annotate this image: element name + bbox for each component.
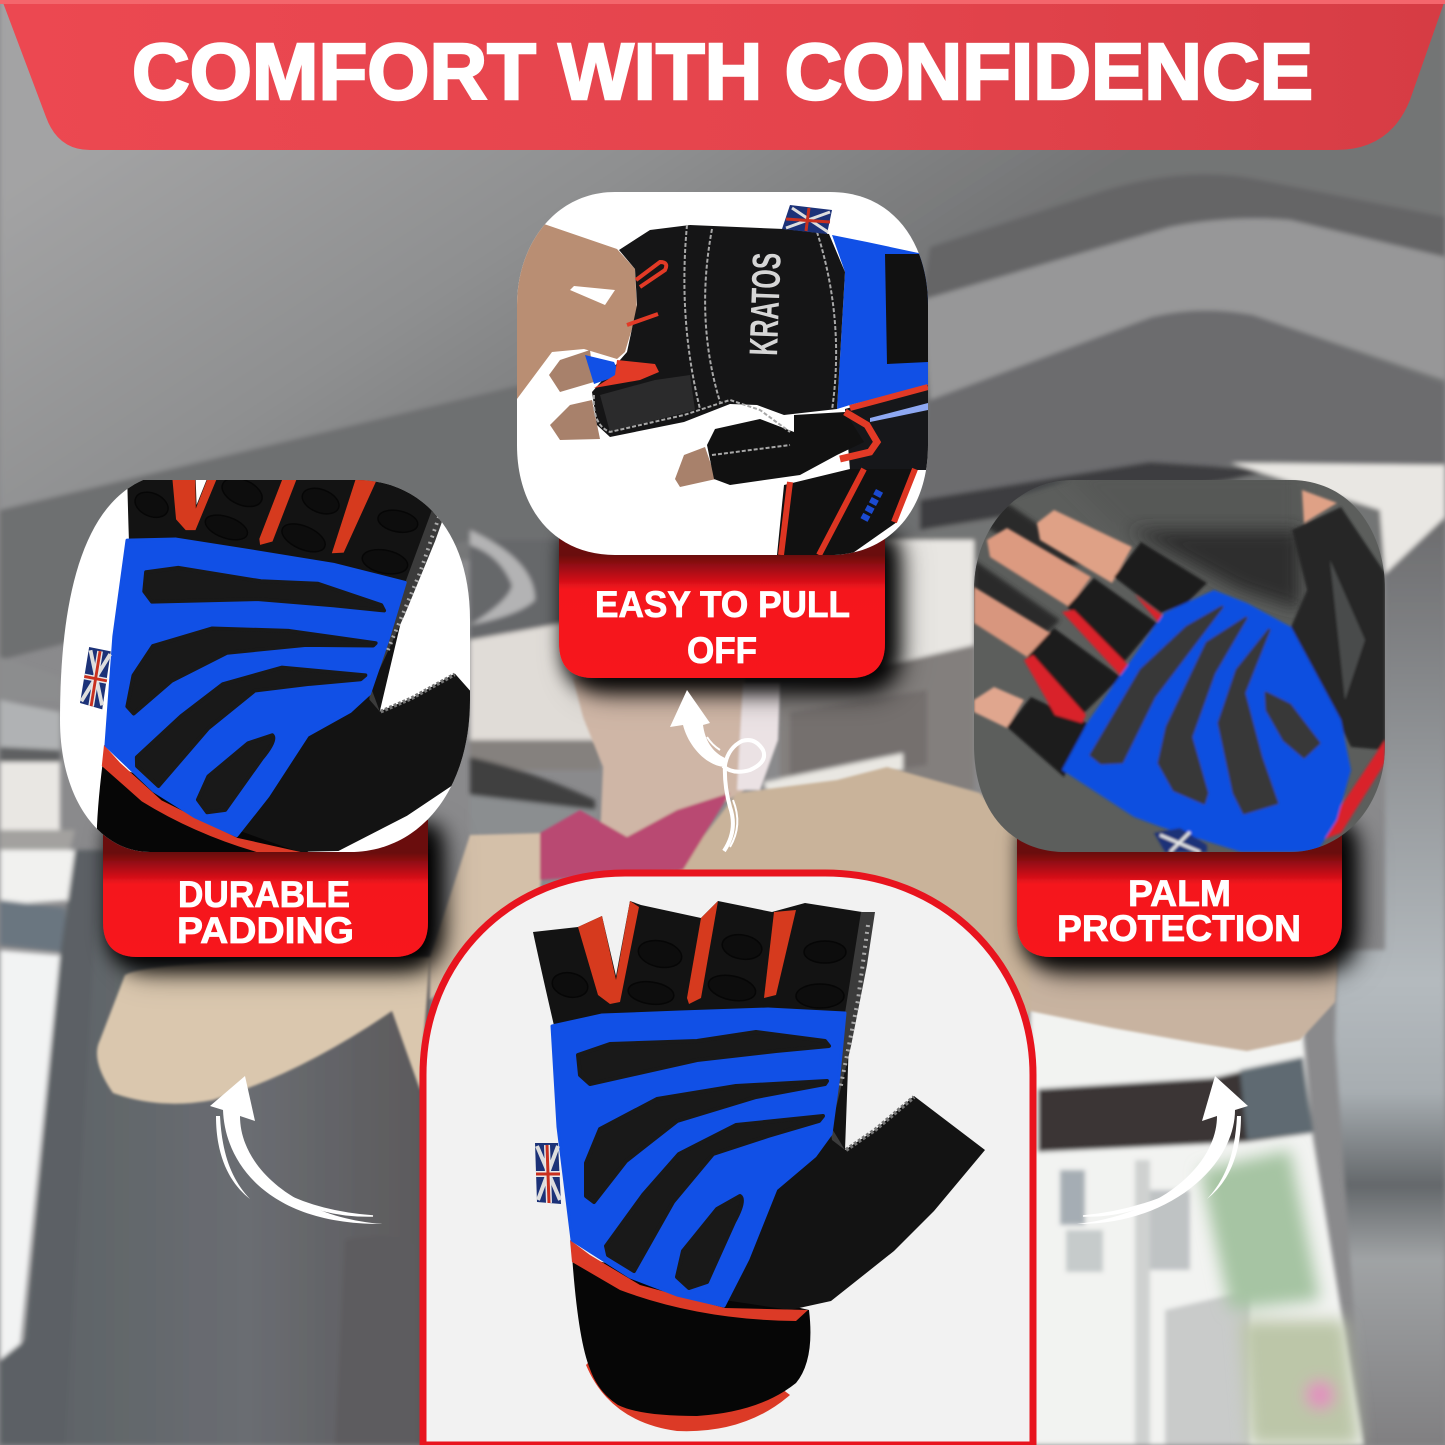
panel: durable padding — [60, 480, 470, 995]
main glove — [533, 901, 985, 1431]
panel: easy to pull off — [517, 192, 928, 678]
arrow: towards palm protection — [1077, 1076, 1248, 1224]
panel: palm protection — [974, 470, 1385, 957]
title banner — [0, 0, 1445, 150]
label: palm protection — [1017, 820, 1342, 957]
label: palm protection: PALM — [1128, 873, 1231, 914]
label: durable padding — [103, 820, 428, 957]
arrow: towards durable padding — [210, 1076, 383, 1224]
label: easy to pull off: OFF — [687, 630, 757, 671]
label: easy to pull off — [559, 530, 885, 678]
panel: main glove arch — [423, 873, 1033, 1445]
label: durable padding: PADDING — [177, 910, 354, 951]
photo card: pulling glove off — [517, 192, 928, 555]
label: palm protection: PROTECTION — [1057, 908, 1301, 949]
brand name: KRATOS — [742, 252, 790, 356]
photo card: glove on open hand — [974, 470, 1385, 852]
label: easy to pull off: EASY TO PULL — [595, 584, 850, 625]
title text: COMFORT WITH CONFIDENCE — [132, 27, 1313, 116]
photo card: padded glove palm — [60, 480, 470, 852]
label: durable padding: DURABLE — [178, 874, 350, 915]
arrow: towards easy to pull off — [670, 690, 764, 851]
